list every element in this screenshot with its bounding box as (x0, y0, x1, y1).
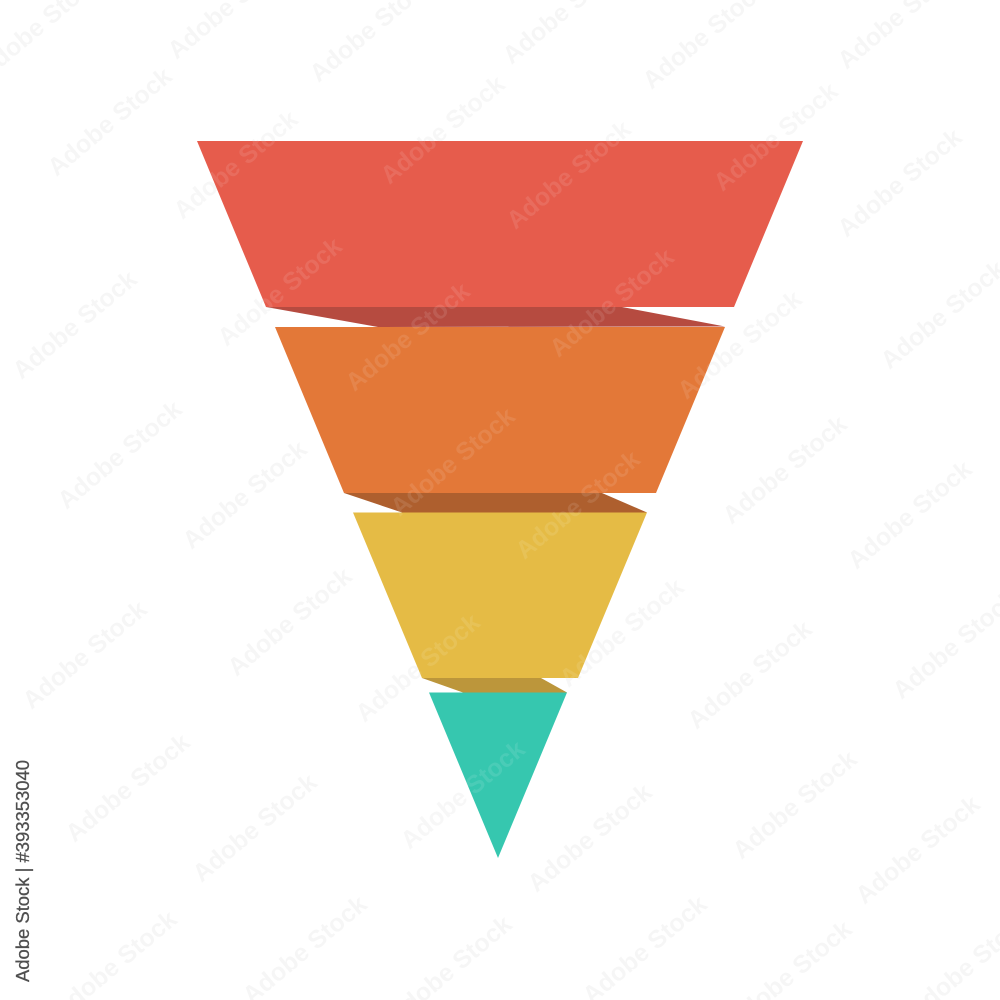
funnel tier 4: teal tip (429, 692, 567, 858)
watermark on background: Adobe Stock (52, 395, 187, 515)
watermark on background: Adobe Stock (501, 115, 636, 235)
fold shadow: red to orange (266, 307, 725, 327)
watermark over funnel: Adobe Stock (212, 232, 347, 352)
watermark on background: Adobe Stock (42, 62, 177, 182)
watermark over funnel: Adobe Stock (544, 243, 679, 363)
watermark on background: Adobe Stock (187, 768, 322, 888)
watermark on background: Adobe Stock (832, 123, 967, 243)
watermark on background: Adobe Stock (717, 410, 852, 530)
watermark on background: Adobe Stock (672, 285, 807, 405)
watermark on background: Adobe Stock (177, 435, 312, 555)
watermark on background: Adobe Stock (375, 70, 510, 190)
watermark on background: Adobe Stock (727, 745, 862, 865)
watermark on background: Adobe Stock (682, 615, 817, 735)
watermark over funnel: Adobe Stock (501, 115, 636, 235)
watermark over funnel (168, 70, 843, 855)
watermark over funnel: Adobe Stock (672, 285, 807, 405)
watermark on background: Adobe Stock (350, 608, 485, 728)
watermark over funnel: Adobe Stock (510, 445, 645, 565)
stock image credit: Adobe Stock | #393353040 (13, 760, 33, 982)
watermark over funnel: Adobe Stock (708, 77, 843, 197)
watermark on background: Adobe Stock (510, 445, 645, 565)
watermark on background: Adobe Stock (554, 573, 689, 693)
watermark over funnel: Adobe Stock (385, 402, 520, 522)
watermark on background: Adobe Stock (522, 778, 657, 898)
watermark on background: Adobe Stock (385, 402, 520, 522)
watermark over funnel: Adobe Stock (350, 608, 485, 728)
watermark on background: Adobe Stock (168, 105, 303, 225)
watermark on background: Adobe Stock (222, 562, 357, 682)
watermark over funnel: Adobe Stock (395, 735, 530, 855)
watermark on background: Adobe Stock (7, 265, 142, 385)
watermark on background: Adobe Stock (544, 243, 679, 363)
watermark on background: Adobe Stock (850, 790, 985, 910)
watermark on background: Adobe Stock (395, 735, 530, 855)
funnel diagram (197, 141, 803, 858)
watermark over funnel: Adobe Stock (375, 70, 510, 190)
watermark over funnel: Adobe Stock (168, 105, 303, 225)
funnel tier 2: orange (275, 327, 725, 493)
watermark on background: Adobe Stock (708, 77, 843, 197)
watermark on background: Adobe Stock (17, 595, 152, 715)
funnel tier 3: yellow (353, 512, 647, 678)
watermark on background: Adobe Stock (340, 277, 475, 397)
watermark on background: Adobe Stock (842, 455, 977, 575)
watermark over funnel: Adobe Stock (340, 277, 475, 397)
fold shadow: orange to yellow (344, 493, 647, 512)
watermark over funnel: Adobe Stock (554, 573, 689, 693)
funnel tier 1: red (197, 141, 803, 307)
watermark on background: Adobe Stock (60, 728, 195, 848)
watermark on background: Adobe Stock (212, 232, 347, 352)
fold shadow: yellow to teal (422, 678, 567, 692)
